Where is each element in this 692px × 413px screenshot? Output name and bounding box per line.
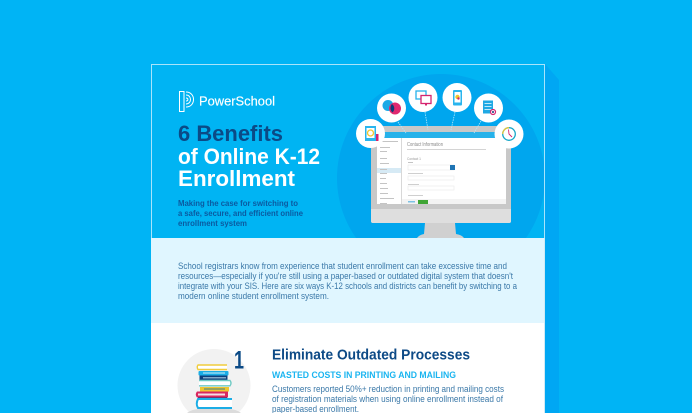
body text: of registration materials when using online enrollment instead of [272, 394, 503, 404]
title: 6 Benefits [178, 121, 283, 146]
icon: stack of books [178, 349, 250, 413]
icon: chat bubbles [377, 94, 406, 122]
title: of Online K-12 [178, 144, 320, 169]
monitor screen: Contact Information [407, 142, 443, 148]
body text [272, 384, 504, 413]
illustration: desktop monitor [371, 112, 511, 238]
panel: benefit 1 [151, 238, 545, 413]
body text: Customers reported 50%+ reduction in printing and mailing costs [272, 384, 504, 394]
panel: header [151, 64, 545, 238]
page shadow [545, 64, 559, 413]
icon: document [474, 94, 503, 122]
big background circle [337, 74, 544, 238]
connector lines [398, 112, 481, 133]
subtitle: Making the case for switching to [178, 198, 298, 208]
logo: PowerSchool: PowerSchool [199, 94, 275, 108]
intro text [178, 261, 517, 301]
heading: Eliminate Outdated Processes: Eliminate Outdated Processes [272, 346, 470, 364]
monitor screen [377, 132, 506, 204]
icon: smartphone [442, 83, 472, 112]
subheading: WASTED COSTS IN PRINTING AND MAILING [272, 370, 456, 381]
subtitle: enrollment system [178, 218, 247, 228]
title [178, 121, 320, 191]
monitor stand [417, 223, 464, 238]
number 1: 1 [234, 346, 244, 374]
subtitle: a safe, secure, and efficient online [178, 208, 303, 218]
panel: intro [151, 238, 545, 323]
title: Enrollment [178, 166, 296, 191]
intro text: integrate with your SIS. Here are six ways K-12 schools and districts can benefit by switching to a [178, 281, 517, 291]
intro text: School registrars know from experience that student enrollment can take excessive time and [178, 261, 507, 271]
subtitle [178, 198, 303, 228]
intro text: modern online student enrollment system. [178, 291, 329, 301]
icon: tablet checklist [356, 119, 385, 148]
icon: monitors [408, 83, 438, 112]
icon: clock [494, 120, 524, 148]
monitor body [371, 126, 511, 223]
logo: PowerSchool [180, 92, 275, 112]
intro text: resources—especially if you're still using a paper-based or outdated digital system that doesn't [178, 271, 513, 281]
monitor screen: Contact 1 [407, 157, 421, 161]
